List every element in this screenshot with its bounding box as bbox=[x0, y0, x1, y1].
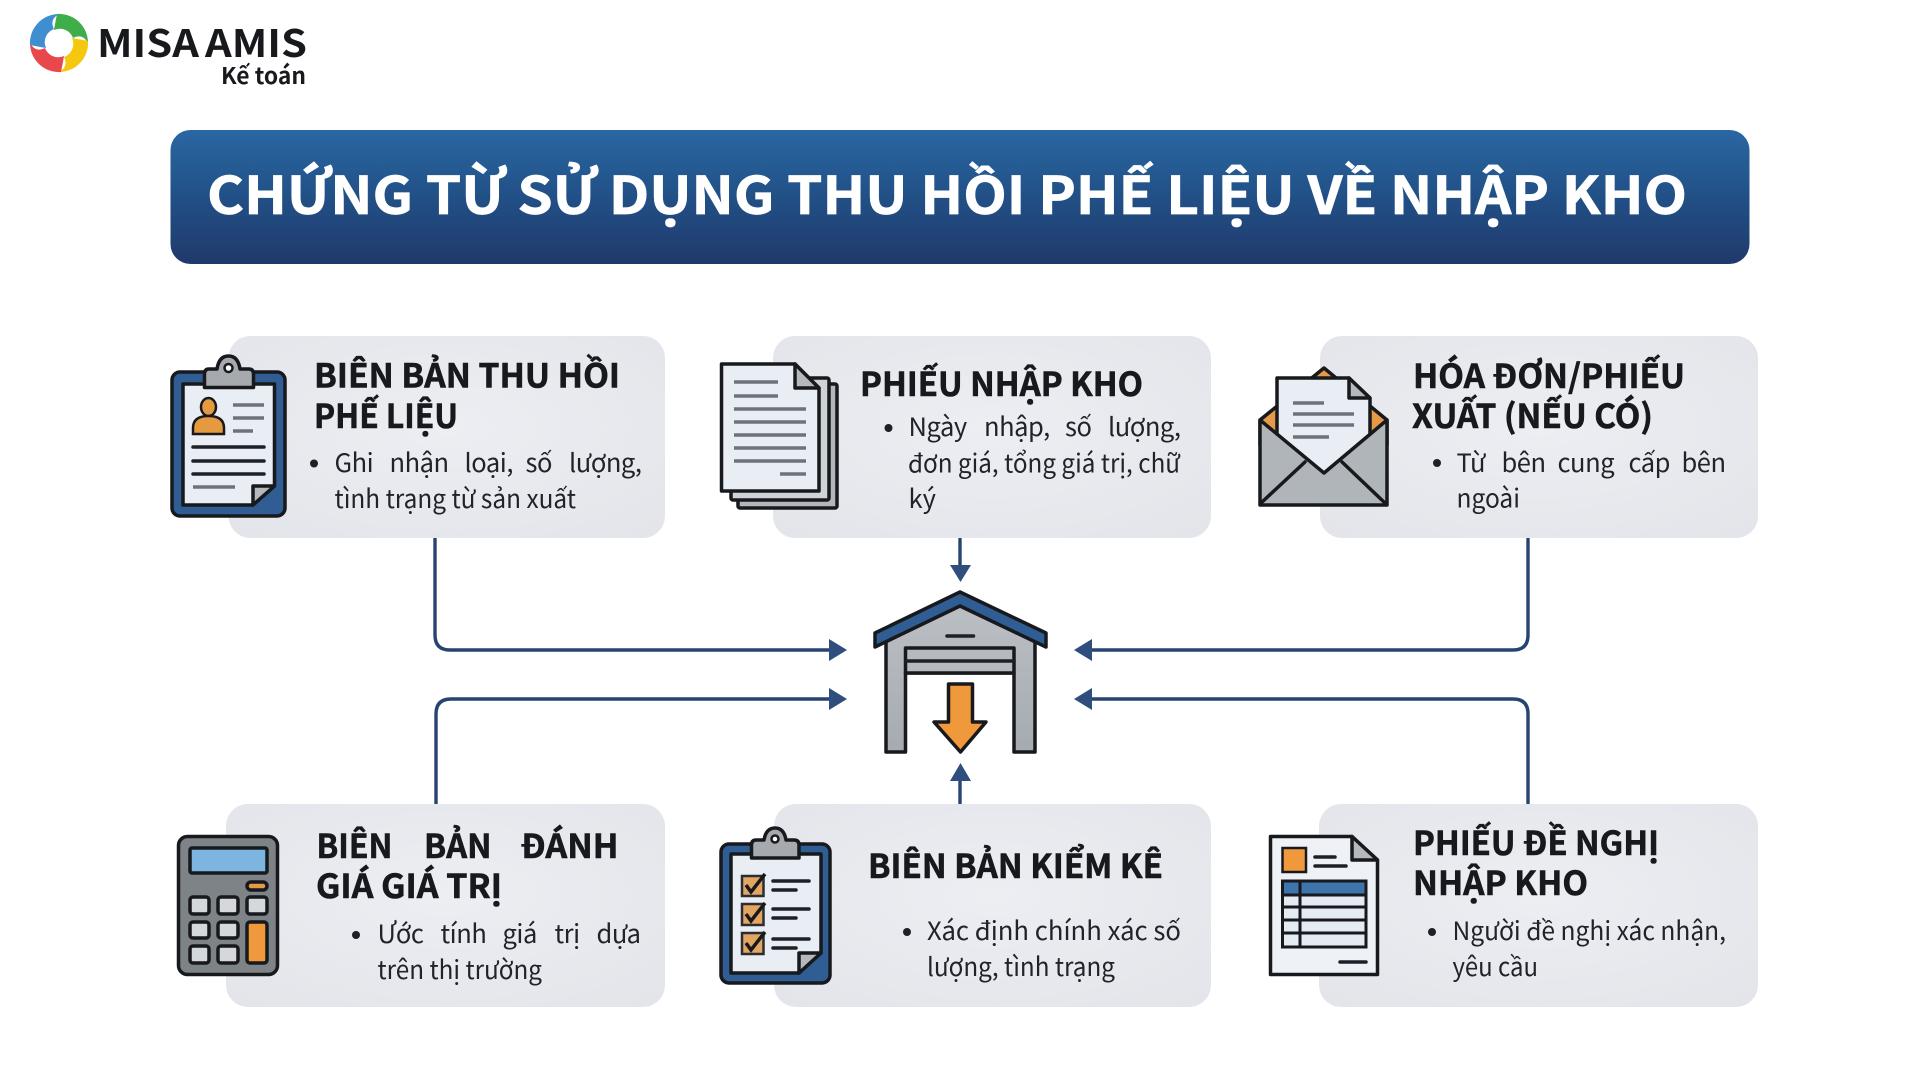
heading: BẢN bbox=[424, 820, 492, 868]
bullet text: trên thị trường bbox=[378, 950, 543, 987]
heading: BIÊN bbox=[316, 820, 392, 868]
bullet text: tính bbox=[440, 914, 486, 951]
bullet text: Ước bbox=[378, 914, 424, 951]
bullet text: nhận bbox=[390, 443, 449, 480]
bullet text: yêu cầu bbox=[1452, 947, 1538, 984]
bullet text: nhập, bbox=[984, 407, 1050, 444]
bullet text: tình trạng từ sản xuất bbox=[334, 479, 576, 516]
panel: Phiếu nhập kho bbox=[722, 336, 1211, 538]
bullet text: Từ bbox=[1456, 443, 1486, 480]
panel: Biên bản đánh giá giá trị bbox=[178, 804, 665, 1007]
bullet text: lượng, bbox=[1108, 407, 1180, 444]
icon: calculator bbox=[178, 836, 278, 974]
bullet text: Người đề nghị xác nhận, bbox=[1452, 911, 1726, 948]
heading: PHẾ LIỆU bbox=[314, 390, 458, 438]
icon: stacked documents bbox=[722, 364, 837, 508]
arrow: bottom right card to warehouse bbox=[1074, 688, 1528, 804]
title banner bbox=[170, 130, 1750, 264]
bullet text: ngoài bbox=[1456, 478, 1520, 516]
bullet text: ký bbox=[908, 479, 936, 516]
bullet text: bên bbox=[1502, 443, 1546, 480]
icon: warehouse with down arrow bbox=[875, 592, 1046, 752]
bullet text: lượng, bbox=[569, 443, 642, 480]
bullet text bbox=[310, 443, 642, 516]
heading: NHẬP KHO bbox=[1413, 857, 1588, 905]
title banner: CHỨNG TỪ SỬ DỤNG THU HỒI PHẾ LIỆU VỀ NHẬP KHO bbox=[207, 154, 1687, 229]
bullet text: cung bbox=[1558, 443, 1615, 480]
panel: Biên bản thu hồi phế liệu bbox=[172, 336, 665, 538]
bullet text bbox=[1433, 443, 1726, 516]
bullet text bbox=[884, 407, 1180, 516]
bullet text: loại, bbox=[464, 443, 513, 480]
bullet text bbox=[352, 914, 641, 987]
bullet text: cấp bbox=[1628, 443, 1670, 480]
bullet text: bên bbox=[1682, 443, 1726, 480]
bullet text: đơn giá, tổng giá trị, chữ bbox=[908, 444, 1180, 480]
arrow: bottom centre card to warehouse bbox=[950, 763, 971, 804]
bullet text: dựa bbox=[596, 914, 641, 951]
heading: PHIẾU NHẬP KHO bbox=[860, 358, 1143, 406]
arrow: top centre card to warehouse bbox=[950, 538, 971, 582]
logo subtitle: Kế toán bbox=[221, 57, 306, 91]
logo wordmark: MISA bbox=[97, 13, 200, 68]
bullet text: Ghi bbox=[334, 443, 373, 480]
bullet text bbox=[1428, 911, 1726, 984]
logo icon: colour swirl bbox=[30, 14, 88, 72]
heading line 2: GIÁ GIÁ TRỊ bbox=[316, 860, 502, 908]
arrow: bottom left card to warehouse bbox=[436, 688, 847, 804]
heading: XUẤT (NẾU CÓ) bbox=[1412, 390, 1653, 438]
heading: BIÊN BẢN THU HỒI bbox=[314, 350, 620, 398]
icon: request form with table bbox=[1270, 836, 1378, 974]
panel: Biên bản kiểm kê bbox=[721, 804, 1211, 1007]
bullet text: lượng, tình trạng bbox=[927, 947, 1116, 984]
bullet text bbox=[903, 911, 1181, 984]
arrow: top right card to warehouse bbox=[1074, 538, 1528, 661]
heading: PHIẾU ĐỀ NGHỊ bbox=[1413, 817, 1659, 865]
icon: clipboard with person bbox=[172, 356, 285, 516]
logo: MISA AMIS Kế toán bbox=[30, 13, 307, 91]
heading: BIÊN BẢN KIỂM KÊ bbox=[868, 840, 1163, 888]
logo wordmark: AMIS bbox=[204, 13, 307, 68]
icon: open envelope with letter bbox=[1260, 368, 1387, 505]
heading: ĐÁNH bbox=[520, 820, 618, 868]
bullet text: giá bbox=[502, 914, 537, 951]
bullet text: Xác định chính xác số bbox=[927, 911, 1181, 948]
bullet text: trị bbox=[554, 914, 580, 951]
heading: HÓA ĐƠN/PHIẾU bbox=[1413, 350, 1685, 398]
connectors into warehouse bbox=[435, 538, 1528, 804]
arrow: top left card to warehouse bbox=[435, 538, 847, 661]
icon: checklist clipboard bbox=[721, 828, 830, 983]
panel: Hóa đơn/Phiếu xuất bbox=[1260, 336, 1758, 538]
bullet text: số bbox=[1065, 407, 1092, 444]
bullet text: số bbox=[526, 443, 552, 480]
panel: Phiếu đề nghị nhập kho bbox=[1270, 804, 1758, 1007]
bullet text: Ngày bbox=[908, 407, 967, 444]
